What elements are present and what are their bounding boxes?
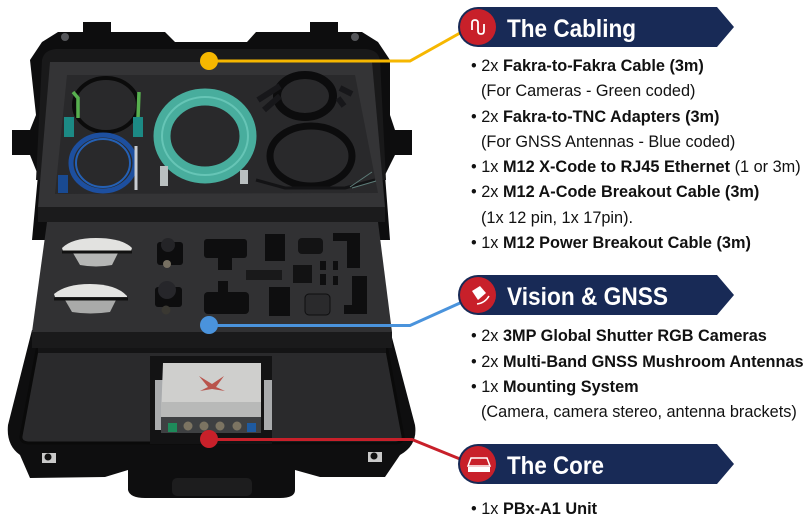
list: cabling items: • 2x Fakra-to-Fakra Cable (3m) [471, 57, 704, 75]
list: cabling items: • 1x M12 Power Breakout Cable (3m) [471, 234, 751, 252]
list: cabling items: (For Cameras - Green coded) [481, 82, 695, 100]
list: cabling items: • 1x M12 X-Code to RJ45 Ethernet (1 or 3m) [471, 158, 801, 176]
connector: blue to Vision and GNSS [200, 303, 460, 334]
case lid [12, 22, 412, 240]
black M12 cable top [258, 75, 352, 117]
mounting brackets [204, 233, 367, 316]
connector: yellow to The Cabling [200, 33, 460, 70]
list: cabling items [471, 57, 801, 252]
connector: red to The Core [200, 430, 460, 459]
icon: cable [472, 20, 484, 34]
heading: Vision and GNSS: Vision & GNSS [507, 283, 668, 311]
list: cabling items: (1x 12 pin, 1x 17pin). [481, 209, 633, 227]
list: vision items: • 2x Multi-Band GNSS Mushroom Antennas [471, 353, 804, 371]
list: vision items: • 2x 3MP Global Shutter RGB Cameras [471, 327, 767, 345]
green-coded Fakra cable [64, 78, 143, 137]
teal ethernet cable [160, 97, 248, 186]
list: cabling items: (For GNSS Antennas - Blue coded) [481, 133, 735, 151]
blue-coded Fakra adapter cable [58, 135, 136, 193]
list: vision items: (Camera, camera stereo, antenna brackets) [481, 403, 797, 421]
icon: unit [468, 458, 490, 472]
heading: The Cabling [458, 7, 734, 47]
upper foam tray with cables [38, 62, 385, 222]
GNSS antenna bottom [54, 284, 128, 314]
PBx-A1 unit [150, 356, 272, 444]
heading: The Cabling: The Cabling [507, 15, 636, 43]
list: vision items [471, 327, 804, 421]
case base [8, 330, 415, 498]
heading: Vision and GNSS [458, 275, 734, 315]
list: cabling items: • 2x Fakra-to-TNC Adapters (3m) [471, 108, 719, 126]
list: vision items: • 1x Mounting System [471, 378, 639, 396]
list: cabling items: • 2x M12 A-Code Breakout Cable (3m) [471, 183, 759, 201]
icon: satellite [472, 286, 489, 304]
heading: The Core [458, 444, 734, 484]
heading: The Core: The Core [507, 452, 604, 480]
list: core items: • 1x PBx-A1 Unit [471, 500, 598, 518]
cameras [155, 238, 183, 314]
middle foam tray [32, 222, 392, 348]
GNSS antenna top [62, 238, 132, 266]
black M12 power cable [256, 126, 376, 188]
equipment case [8, 22, 415, 498]
